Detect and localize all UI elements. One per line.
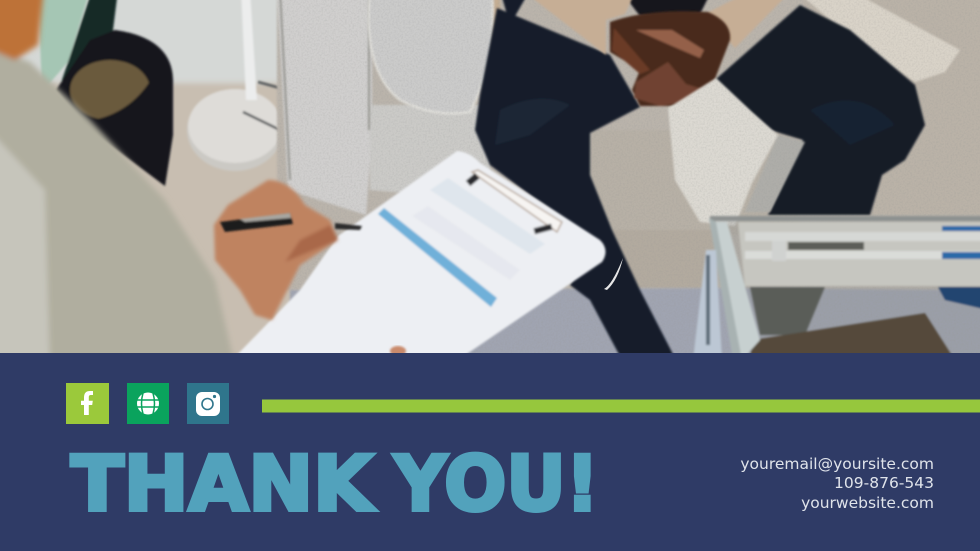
contact details: 109-876-543	[834, 474, 934, 492]
contact details	[740, 455, 934, 512]
clipboard	[232, 151, 606, 360]
knit throw on the sofa	[795, 0, 960, 82]
icon: facebook	[66, 383, 109, 424]
icon: instagram	[187, 383, 229, 424]
sleeves	[522, 0, 792, 55]
photo: therapy session	[0, 0, 980, 380]
green divider bar	[262, 400, 980, 412]
dark trousers	[475, 0, 925, 360]
rug	[290, 288, 980, 360]
glass table	[693, 216, 980, 360]
plant and pot	[38, 0, 173, 186]
title: YOU!	[393, 439, 599, 528]
small fingertip at clipboard edge	[390, 346, 406, 356]
footer band	[0, 353, 980, 551]
sofa	[277, 0, 980, 290]
writing hand with pen	[214, 180, 338, 320]
knit blanket	[668, 78, 805, 226]
title	[71, 439, 599, 528]
clasped hands	[610, 11, 730, 106]
sofa seams	[280, 0, 369, 180]
pen	[220, 213, 362, 232]
shoe swoosh	[604, 258, 623, 290]
contact details: youremail@yoursite.com	[740, 455, 934, 473]
icon: globe	[127, 383, 169, 424]
blurred foreground person	[0, 0, 236, 370]
contact details: yourwebsite.com	[801, 494, 934, 512]
room background	[16, 0, 940, 353]
pillow	[369, 0, 500, 114]
title: THANK	[71, 439, 376, 528]
floor lamp	[187, 0, 283, 171]
